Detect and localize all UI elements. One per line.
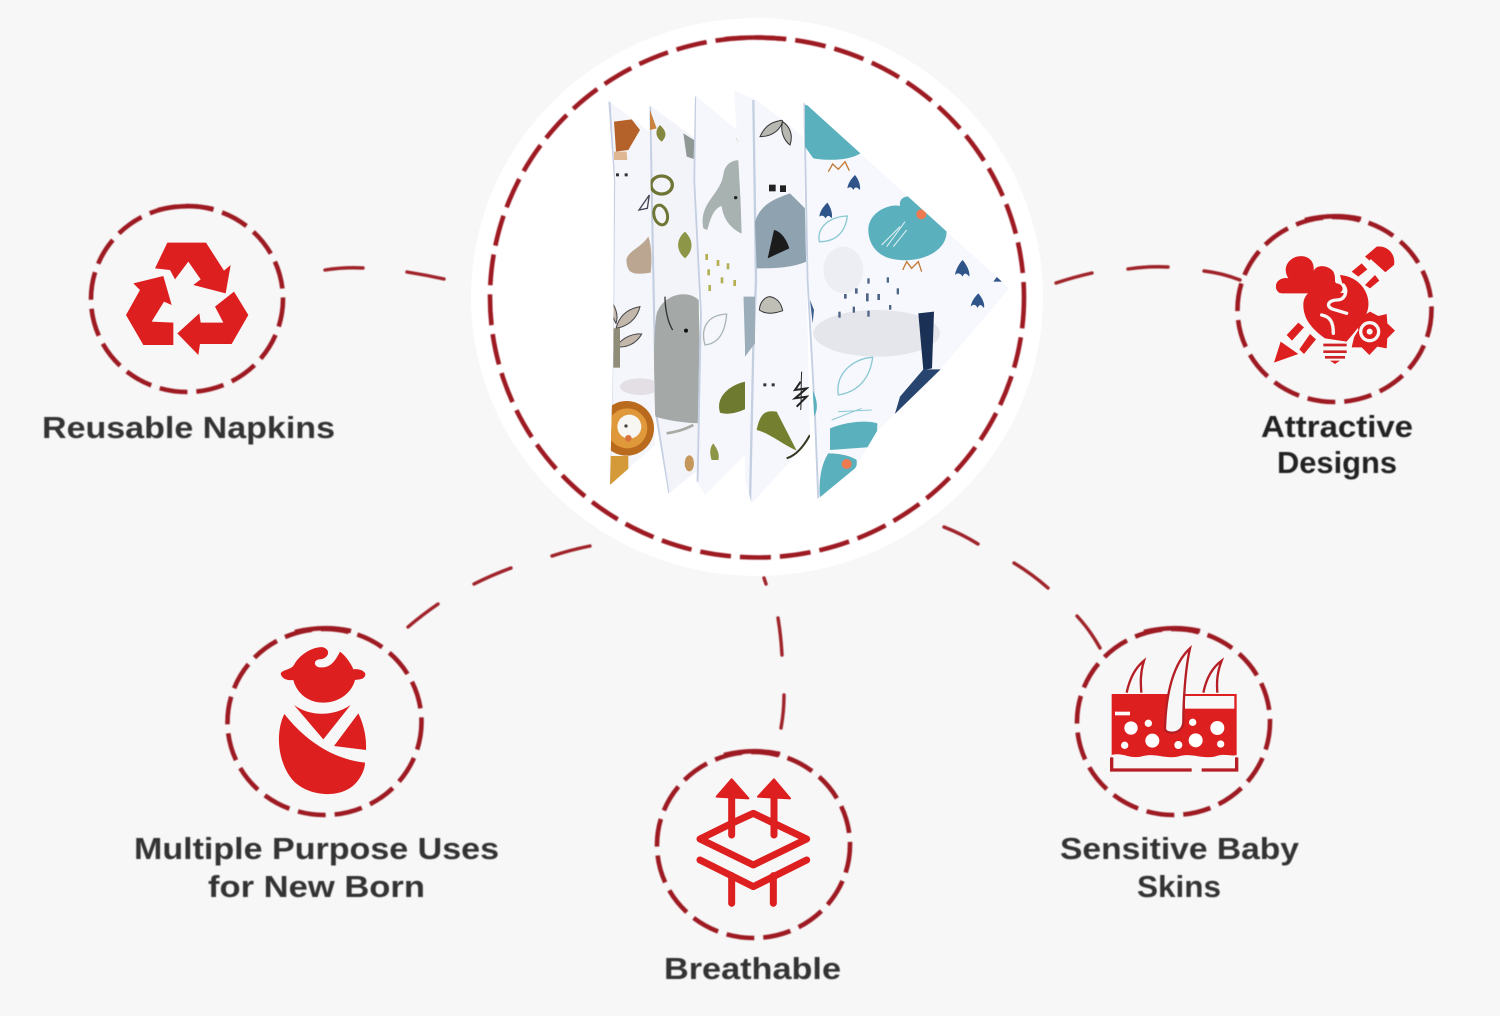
napkin 4: [733, 90, 812, 507]
label line 1: Multiple Purpose Uses: [134, 831, 499, 866]
white halo disc: [471, 18, 1043, 576]
bulb: [1303, 275, 1369, 342]
label line 2: Skins: [1137, 869, 1221, 904]
label line 1: Attractive: [1261, 409, 1413, 444]
dashed ring: [91, 206, 283, 392]
feature: Breathable: [657, 751, 850, 986]
connector: bottom to Breathable: [764, 578, 784, 728]
napkin 2: [650, 106, 700, 494]
central dashed ring: [490, 38, 1024, 558]
connector: bottom-right to Sensitive Baby Skins: [944, 527, 1100, 648]
label: Breathable: [664, 951, 841, 986]
label line 2: for New Born: [208, 869, 425, 904]
feature: Reusable Napkins: [42, 206, 335, 445]
icon: idea bulb, pencil, gear: [1274, 246, 1395, 364]
connector: right to Attractive Designs: [1056, 267, 1240, 283]
central product circle: [487, 34, 1027, 560]
bulb base: [1323, 345, 1347, 357]
icon: skin layers with hair: [1112, 648, 1237, 770]
cloud: [1276, 256, 1343, 293]
napkin 1: [608, 101, 655, 485]
feature: Attractive Designs: [1238, 216, 1432, 480]
icon: swaddled baby: [279, 647, 366, 794]
dashed ring: [1077, 628, 1270, 815]
napkin 5, front: [802, 100, 1012, 503]
dashed ring: [1238, 216, 1432, 402]
label line 1: Sensitive Baby: [1060, 831, 1300, 866]
connector: left to Reusable Napkins: [325, 268, 444, 279]
dashed ring: [657, 751, 850, 938]
pencil: [1274, 246, 1394, 363]
gear: [1352, 312, 1395, 355]
icon: recycle: [126, 243, 248, 355]
dashed ring: [228, 628, 422, 815]
label line 2: Designs: [1277, 445, 1397, 480]
feature: Sensitive Baby Skins: [1060, 628, 1300, 904]
connector: bottom-left to Multiple Purpose: [408, 546, 590, 627]
product photo: folded napkins: [599, 90, 1012, 507]
napkin 3: [694, 96, 745, 494]
icon: breathable fabric arrows: [700, 779, 807, 903]
feature: Multiple Purpose Uses: [134, 628, 499, 904]
label: Reusable Napkins: [42, 410, 335, 445]
